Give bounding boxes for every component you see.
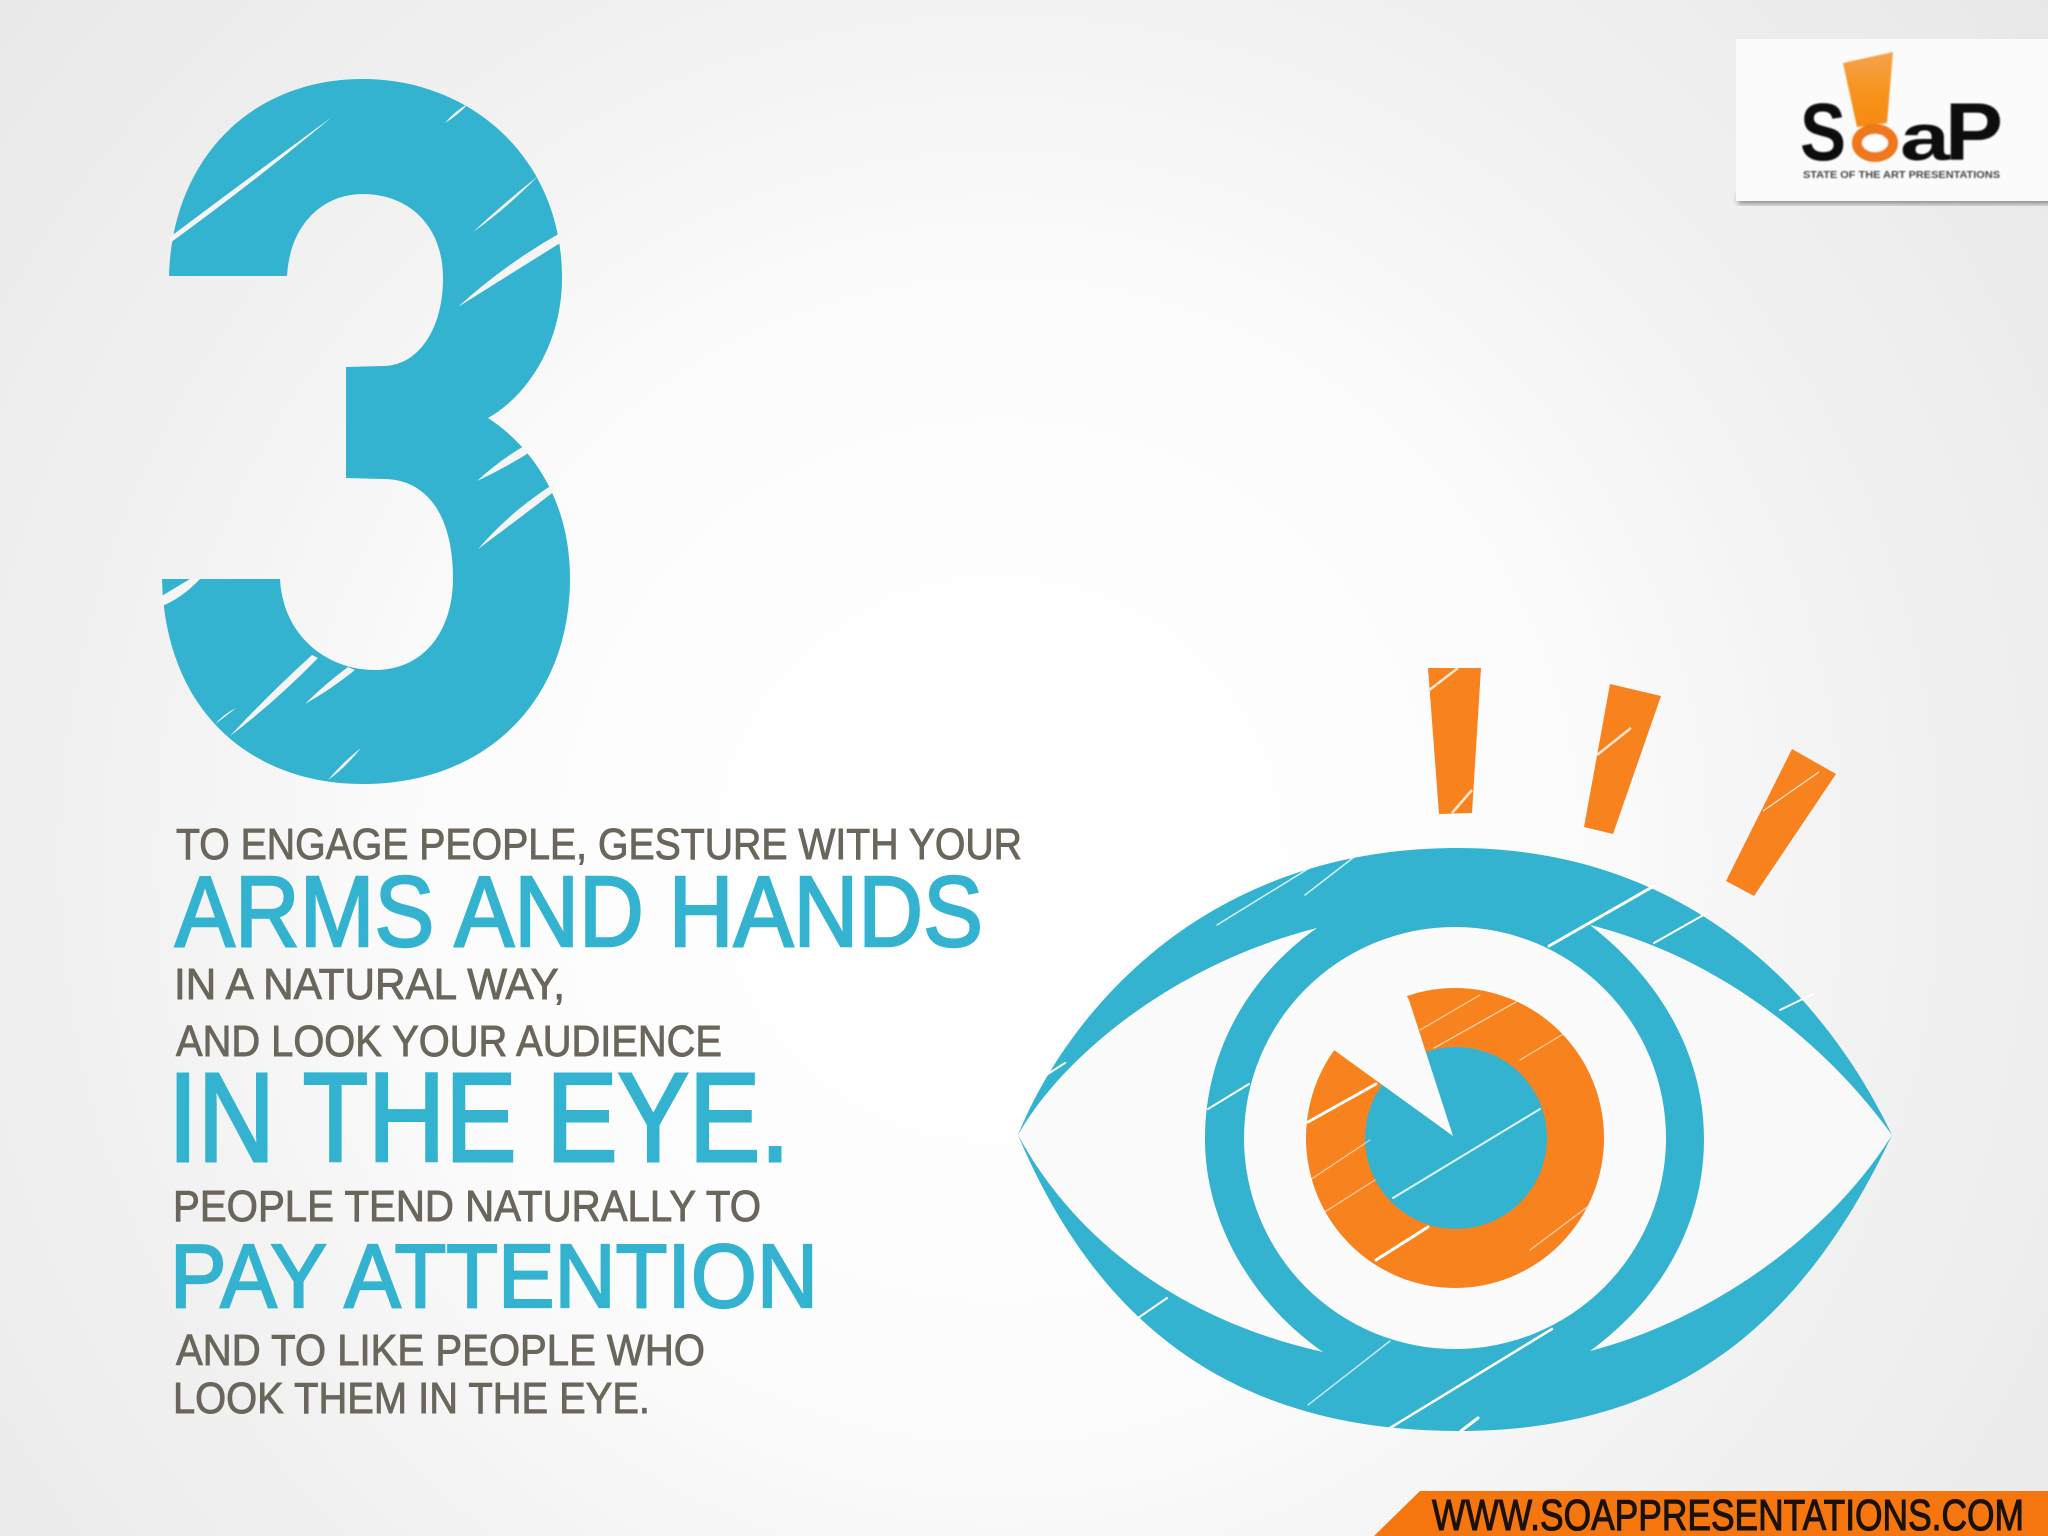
text line: look them in the eye: LOOK THEM IN THE EYE.: [173, 1374, 650, 1423]
text block: message: [168, 820, 1022, 1423]
eye outline and iris ring: [1018, 848, 1892, 1431]
logo mark: [1800, 52, 2003, 181]
text line: and to like people who: AND TO LIKE PEOPLE WHO: [176, 1326, 705, 1375]
big numeral 3: [160, 79, 570, 784]
orange iris: [1306, 988, 1604, 1288]
card shadow: [1738, 194, 2048, 204]
icon: exclamation mark: [1843, 52, 1893, 127]
logo letter S: S: [1800, 87, 1846, 178]
logo tagline: STATE OF THE ART PRESENTATIONS: [1803, 170, 2000, 181]
teal pupil: [1365, 1047, 1547, 1229]
inner white of the eye: [1244, 927, 1666, 1349]
footer banner: [1374, 1491, 2048, 1536]
icon: three orange rays: [1428, 668, 1836, 896]
text line: people tend naturally to: PEOPLE TEND NATURALLY TO: [173, 1182, 761, 1231]
icon: eye with rays: [1018, 668, 1892, 1431]
icon: orange ring: [1857, 129, 1893, 157]
logo letter a: a: [1900, 100, 1952, 174]
left sclera: [1018, 928, 1323, 1352]
iris wedge cut-out: [1320, 975, 1453, 1136]
text line: in a natural way: IN A NATURAL WAY,: [174, 960, 565, 1009]
right sclera: [1590, 925, 1892, 1351]
scratch highlights: [1032, 854, 1813, 1431]
text line: to engage people: TO ENGAGE PEOPLE, GESTURE WITH YOUR: [176, 820, 1022, 869]
highlight: pay attention: PAY ATTENTION: [170, 1227, 818, 1327]
logo card: [1736, 39, 2048, 204]
logo letter P: P: [1945, 87, 2003, 178]
highlight: in the eye: IN THE EYE.: [168, 1047, 790, 1188]
card background: [1736, 39, 2048, 201]
banner shape: [1374, 1491, 2048, 1536]
highlight: arms and hands: ARMS AND HANDS: [175, 856, 983, 968]
text line: and look your audience: AND LOOK YOUR AUDIENCE: [176, 1017, 722, 1066]
